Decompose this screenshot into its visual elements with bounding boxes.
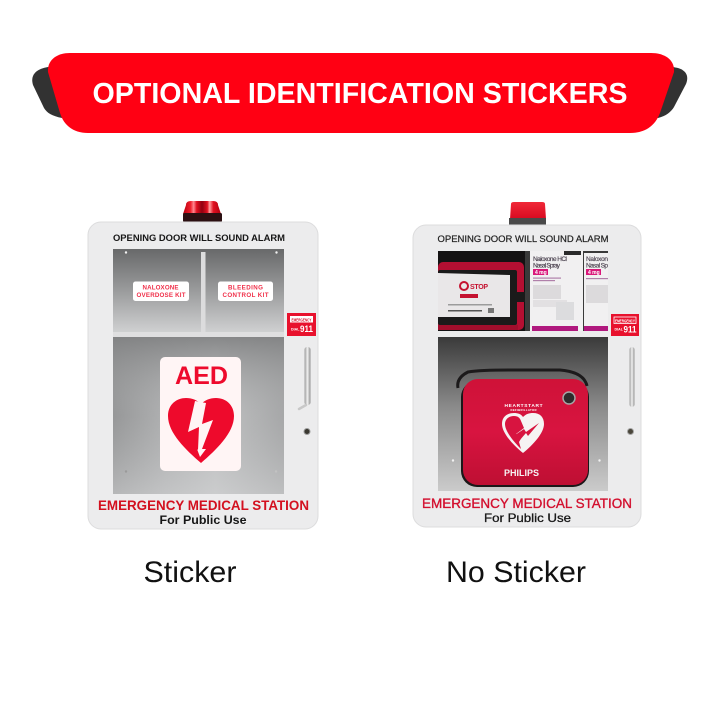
sticker: naloxone overdose kit: OVERDOSE KIT xyxy=(136,292,186,299)
alarm warning text: OPENING DOOR WILL SOUND ALARM xyxy=(113,232,285,243)
PHILIPS label: PHILIPS xyxy=(504,468,539,478)
naloxone box second: Naloxon xyxy=(586,256,608,263)
alarm beacon xyxy=(183,201,222,222)
bleeding control kit compartment xyxy=(438,251,525,331)
sticker: emergency dial 911: DIAL xyxy=(291,328,300,332)
caption: sticker: Sticker xyxy=(144,556,237,589)
case body xyxy=(463,379,588,485)
public use label: For Public Use xyxy=(484,511,571,525)
banner red plate xyxy=(48,53,674,133)
case strap xyxy=(458,370,587,388)
sticker: emergency dial 911: 911 xyxy=(300,324,313,334)
cabinet body xyxy=(413,225,641,527)
window lower compartment xyxy=(113,337,284,494)
alarm warning text: OPENING DOOR WILL SOUND ALARM xyxy=(438,233,609,244)
sticker: bleeding control kit: BLEEDING xyxy=(228,284,263,292)
naloxone box front: Nasal Spray xyxy=(533,262,561,270)
sticker: emergency dial 911 xyxy=(611,314,639,336)
AED carry case: DEFIBRILLATOR xyxy=(510,408,536,412)
sticker: bleeding control kit: CONTROL KIT xyxy=(222,292,269,299)
door lock xyxy=(304,428,310,434)
sticker: emergency dial 911: EMERGENCY xyxy=(292,318,312,324)
icon: heart with lightning bolt xyxy=(168,398,234,463)
naloxone box front xyxy=(530,251,583,331)
sticker: bleeding control kit xyxy=(218,282,273,301)
lower compartment xyxy=(438,337,608,491)
sticker: emergency dial 911: 911 xyxy=(624,324,636,334)
AED sign xyxy=(160,357,241,471)
public use label: For Public Use xyxy=(160,513,247,527)
case grommet xyxy=(563,392,575,404)
window upper compartment xyxy=(113,249,284,332)
AED carry case xyxy=(458,370,589,487)
banner xyxy=(32,53,687,133)
title: OPTIONAL IDENTIFICATION STICKERS xyxy=(92,78,628,110)
stop the bleed pouch: STOP xyxy=(470,284,488,291)
naloxone boxes xyxy=(525,251,608,331)
naloxone box second: Nasal Sp xyxy=(586,262,608,270)
sticker: naloxone overdose kit: NALOXONE xyxy=(142,284,178,292)
door handle xyxy=(299,347,310,409)
icon: heart logo xyxy=(502,413,544,453)
naloxone box second xyxy=(584,253,608,331)
naloxone box second: 4 mg xyxy=(588,270,600,276)
station label: EMERGENCY MEDICAL STATION xyxy=(422,495,632,511)
AED label: AED xyxy=(175,362,228,390)
cabinet: no sticker version xyxy=(413,202,641,527)
naloxone box front: 4 mg xyxy=(535,270,547,276)
sticker: emergency dial 911: DIAL xyxy=(614,328,624,332)
sticker: emergency dial 911: EMERGENCY xyxy=(615,318,636,324)
cabinet: sticker version xyxy=(88,201,318,529)
heartstart text: HEARTSTART xyxy=(504,403,543,409)
banner ribbon tails xyxy=(32,67,687,118)
cabinet body xyxy=(88,222,318,529)
sticker: naloxone overdose kit xyxy=(133,282,189,301)
sticker: emergency dial 911 xyxy=(287,313,316,336)
shelf xyxy=(113,332,284,337)
door lock xyxy=(628,428,634,434)
shelf xyxy=(438,331,608,337)
alarm beacon xyxy=(509,202,546,225)
door handle xyxy=(630,347,634,407)
naloxone box front: Naloxone HCl xyxy=(533,256,568,263)
caption: no sticker: No Sticker xyxy=(446,556,586,589)
station label: EMERGENCY MEDICAL STATION xyxy=(98,497,309,513)
